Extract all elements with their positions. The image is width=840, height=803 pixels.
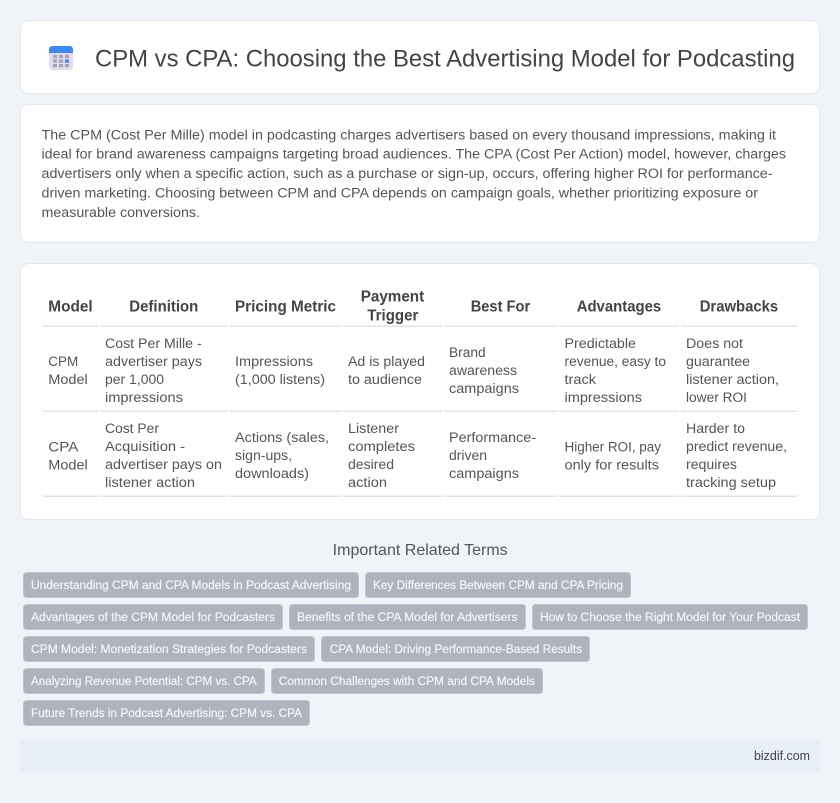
panel: related term tags: CPM Model: Monetization Strategies for Podcasters — [31, 642, 307, 656]
table header row: Advantages — [577, 299, 661, 316]
table row: CPA model: requires — [686, 457, 737, 473]
table row: CPM model: CPM — [48, 354, 78, 370]
table row: CPM model: awareness — [449, 363, 517, 379]
table row: CPM model: Model — [48, 372, 88, 388]
panel: related term tags: Future Trends in Podcast Advertising: CPM vs. CPA — [31, 706, 303, 720]
table header row: Trigger — [367, 308, 418, 325]
table row: CPM model: revenue, easy to — [564, 354, 666, 370]
table row: CPM model: impressions — [105, 390, 183, 406]
title: CPM vs CPA: Choosing the Best Advertising Model for Podcasting — [95, 46, 795, 73]
text block: introduction: driven marketing. Choosing between CPM and CPA depends on campaign goals, whether prioritizing exposure or — [42, 186, 758, 202]
panel: related term tags: Advantages of the CPM Model for Podcasters — [31, 610, 275, 624]
panel: related term tags: CPA Model: Driving Performance-Based Results — [330, 642, 582, 656]
table row: CPM model — [48, 336, 779, 406]
table row: CPM model: campaigns — [449, 381, 519, 397]
table rules — [43, 326, 797, 497]
table row: CPA model: driven — [449, 448, 487, 464]
text block: introduction: The CPM (Cost Per Mille) model in podcasting charges advertisers based on every thousand impressions, making it — [42, 127, 776, 143]
panel: related term tags: Benefits of the CPA Model for Advertisers — [297, 610, 518, 624]
icon: calendar — [49, 46, 73, 70]
text block: introduction: advertisers only when a specific action, such as a purchase or sign-up, occurs, offering higher ROI for performance- — [42, 166, 773, 182]
table row: CPM model: Brand — [449, 345, 486, 361]
table row: CPA model: completes — [348, 439, 415, 455]
table row: CPA model: tracking setup — [686, 475, 776, 491]
table row: CPA model: downloads) — [235, 466, 309, 482]
table row: CPM model: (1,000 listens) — [235, 372, 325, 388]
table header row: Drawbacks — [700, 299, 779, 316]
text block: introduction — [42, 127, 786, 221]
table row: CPA model: only for results — [564, 458, 659, 474]
table row: CPA model: Performance- — [449, 430, 536, 446]
table header row: Definition — [129, 299, 198, 316]
table row: CPM model: advertiser pays — [105, 354, 202, 370]
table row: CPA model: Higher ROI, pay — [564, 440, 662, 456]
text block: introduction: ideal for brand awareness campaigns targeting broad audiences. The CPA (Cost Per Action) model, however, charges — [42, 147, 786, 163]
panel: related term tags: How to Choose the Right Model for Your Podcast — [540, 610, 801, 624]
heading: important related terms: Important Related Terms — [333, 542, 508, 559]
panel: introduction paragraph — [20, 104, 820, 242]
table row: CPM model: impressions — [564, 390, 642, 406]
table row: CPM model: per 1,000 — [105, 372, 164, 388]
table row: CPA model: desired — [348, 457, 394, 473]
table row: CPA model: Listener — [348, 421, 399, 437]
table row: CPM model: guarantee — [686, 354, 750, 370]
table row: CPM model: Ad is played — [348, 354, 425, 370]
table row: CPA model: advertiser pays on — [105, 457, 222, 473]
footer text: site name: bizdif.com — [754, 748, 810, 763]
table header row: Best For — [471, 299, 530, 316]
panel: comparison table — [20, 264, 820, 520]
table row: CPA model: listener action — [105, 475, 195, 491]
panel: related term tags: Understanding CPM and CPA Models in Podcast Advertising — [31, 578, 351, 592]
table header row — [48, 289, 779, 325]
table row: CPA model: predict revenue, — [686, 439, 787, 455]
table header row: Payment — [361, 289, 424, 306]
table row: CPM model: Impressions — [235, 354, 313, 370]
table row: CPA model: Actions (sales, — [235, 430, 329, 446]
table header row: Pricing Metric — [235, 299, 336, 316]
table row: CPM model: Cost Per Mille - — [105, 336, 202, 352]
table header row: Model — [48, 299, 93, 316]
panel: related term tags: Common Challenges with CPM and CPA Models — [279, 674, 535, 688]
table row: CPM model: lower ROI — [686, 390, 747, 406]
header panel — [20, 20, 820, 94]
table row: CPA model: CPA — [48, 440, 79, 456]
table row: CPM model: Does not — [686, 336, 743, 352]
table row: CPA model: action — [348, 475, 387, 491]
table row: CPA model: Model — [48, 458, 88, 474]
table row: CPA model — [48, 421, 787, 491]
text block: introduction: measurable conversions. — [42, 205, 200, 221]
table row: CPA model: sign-ups, — [235, 448, 292, 464]
panel: related term tags: Analyzing Revenue Potential: CPM vs. CPA — [31, 674, 258, 688]
table row: CPM model: track — [564, 372, 597, 388]
panel: related term tags — [24, 572, 808, 726]
table row: CPM model: listener action, — [686, 372, 779, 388]
table row: CPA model: campaigns — [449, 466, 519, 482]
table row: CPM model: Predictable — [564, 336, 636, 352]
panel: related term tags: Key Differences Between CPM and CPA Pricing — [373, 578, 623, 592]
table row: CPA model: Cost Per — [105, 421, 159, 437]
table row: CPA model: Acquisition - — [105, 439, 185, 455]
footer — [20, 739, 820, 773]
table row: CPM model: to audience — [348, 372, 422, 388]
table row: CPA model: Harder to — [686, 421, 745, 437]
